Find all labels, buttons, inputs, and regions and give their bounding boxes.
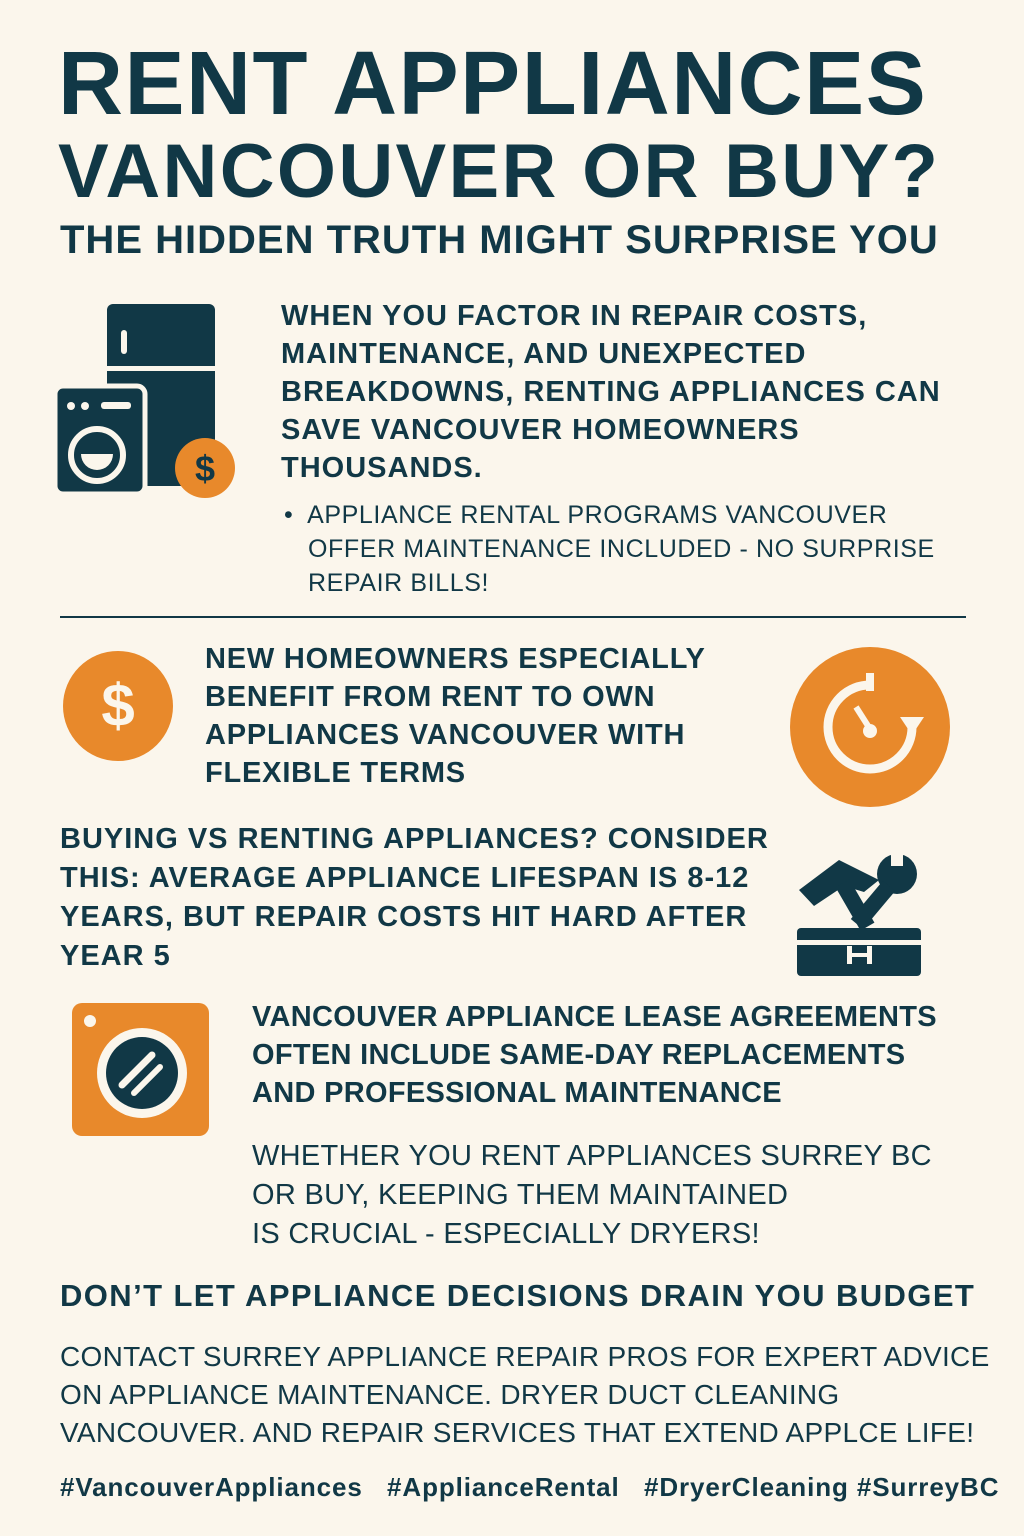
bullet: rental programs: • APPLIANCE RENTAL PROGRAMS VANCOUVER: [284, 501, 887, 529]
text: surrey bc: WHETHER YOU RENT APPLIANCES SURREY BC: [252, 1140, 932, 1172]
text: contact: [60, 1341, 990, 1448]
text: repair costs: [281, 300, 941, 484]
heading: budget: DON’T LET APPLIANCE DECISIONS DRAIN YOU BUDGET: [60, 1278, 975, 1313]
text: lease agreements: [252, 1001, 937, 1109]
icon: tools: [797, 855, 921, 976]
text: lease agreements: AND PROFESSIONAL MAINTENANCE: [252, 1077, 782, 1109]
text: contact: ON APPLIANCE MAINTENANCE. DRYER DUCT CLEANING: [60, 1379, 840, 1410]
text: repair costs: WHEN YOU FACTOR IN REPAIR COSTS,: [281, 300, 867, 332]
text: new homeowners: NEW HOMEOWNERS ESPECIALLY: [205, 643, 706, 675]
bullet: rental programs: OFFER MAINTENANCE INCLUDED - NO SURPRISE: [308, 535, 935, 563]
icon: dollar circle: $: [101, 672, 135, 739]
text: buying vs renting: YEARS, BUT REPAIR COSTS HIT HARD AFTER: [60, 901, 747, 933]
text: lease agreements: OFTEN INCLUDE SAME-DAY REPLACEMENTS: [252, 1039, 905, 1071]
text: lease agreements: VANCOUVER APPLIANCE LEASE AGREEMENTS: [252, 1001, 937, 1033]
icon: appliances with dollar: $: [195, 448, 215, 489]
subtitle: THE HIDDEN TRUTH MIGHT SURPRISE YOU: [60, 218, 939, 262]
text: repair costs: SAVE VANCOUVER HOMEOWNERS: [281, 414, 800, 446]
text: buying vs renting: YEAR 5: [60, 940, 171, 972]
icon: dollar circle: [63, 651, 173, 761]
title: RENT APPLIANCES: [58, 34, 927, 134]
text: repair costs: THOUSANDS.: [281, 452, 483, 484]
text: contact: VANCOUVER. AND REPAIR SERVICES THAT EXTEND APPLCE LIFE!: [60, 1417, 974, 1448]
text: new homeowners: APPLIANCES VANCOUVER WITH: [205, 719, 685, 751]
text: new homeowners: FLEXIBLE TERMS: [205, 757, 466, 789]
text: surrey bc: IS CRUCIAL - ESPECIALLY DRYERS!: [252, 1218, 760, 1250]
title: VANCOUVER OR BUY?: [58, 129, 940, 214]
text: contact: CONTACT SURREY APPLIANCE REPAIR PROS FOR EXPERT ADVICE: [60, 1341, 990, 1372]
text: buying vs renting: [60, 823, 769, 972]
icon: dryer square: [72, 1003, 209, 1136]
icon: appliances with dollar: [58, 304, 235, 498]
icon: clock: [790, 647, 950, 807]
text: surrey bc: [252, 1140, 932, 1250]
hashtags: #VancouverAppliances #ApplianceRental #DryerCleaning #SurreyBC: [60, 1472, 999, 1502]
text: surrey bc: OR BUY, KEEPING THEM MAINTAINED: [252, 1179, 788, 1211]
bullet: rental programs: REPAIR BILLS!: [308, 569, 489, 597]
text: repair costs: MAINTENANCE, AND UNEXPECTED: [281, 338, 806, 370]
text: new homeowners: [205, 643, 706, 789]
title: [58, 34, 940, 214]
bullet: rental programs: [284, 501, 935, 597]
text: buying vs renting: BUYING VS RENTING APPLIANCES? CONSIDER: [60, 823, 769, 855]
text: repair costs: BREAKDOWNS, RENTING APPLIANCES CAN: [281, 376, 941, 408]
text: buying vs renting: THIS: AVERAGE APPLIANCE LIFESPAN IS 8-12: [60, 862, 749, 894]
text: new homeowners: BENEFIT FROM RENT TO OWN: [205, 681, 655, 713]
